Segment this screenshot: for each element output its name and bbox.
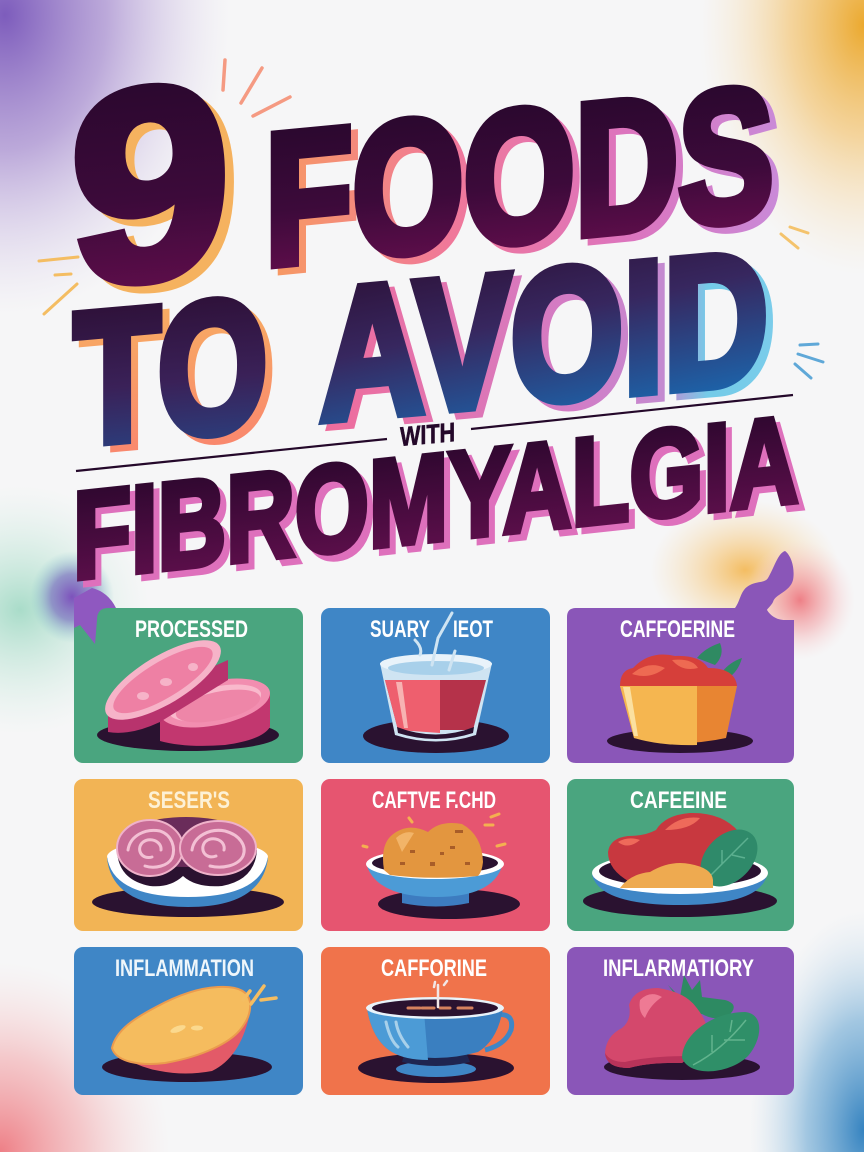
icon: mango half: [102, 986, 276, 1082]
label: CAFEEINE: [630, 787, 727, 814]
label: CAFFORINE: [381, 955, 487, 982]
label: CAFTVE F.CHD: [372, 787, 496, 814]
panel: inflammation: [74, 947, 303, 1095]
panel: sugary: [321, 608, 550, 763]
title word: FIBROMYALGIA: FIBROMYALGIA: [73, 391, 799, 606]
title word: FIBROMYALGIA: FIBROMYALGIA: [79, 397, 805, 612]
panel: processed: [74, 588, 303, 763]
purple splash on card corner: [74, 588, 116, 644]
icon: tomato dessert cup: [607, 643, 753, 753]
label: PROCESSED: [135, 616, 248, 643]
icon: fried food in bowl: [363, 814, 520, 919]
label: [370, 616, 493, 643]
spark lines: blue right: [795, 344, 823, 378]
icon: swirl meat on plate: [92, 817, 284, 917]
spark lines: yellow right: [781, 227, 808, 248]
title word: 9: 9: [79, 32, 239, 350]
icon: drinking glass: [363, 613, 509, 753]
panel: caftive: [321, 779, 550, 931]
icon: sliced sausage: [94, 625, 279, 751]
title divider left: [76, 439, 387, 471]
title word: FOODS: FOODS: [265, 48, 774, 305]
icon: berry and leaves: [604, 975, 760, 1080]
icon: coffee cup: [358, 981, 514, 1083]
panel: sesers: [74, 779, 303, 931]
icon: plated tomato and leaf: [583, 813, 777, 917]
panel: caffeine top: [567, 551, 794, 763]
title divider right: [471, 395, 793, 429]
title: [70, 25, 805, 612]
title word: AVOID: AVOID: [320, 211, 768, 460]
label: INFLARMATIORY: [603, 955, 754, 982]
title word: TO: TO: [74, 259, 268, 485]
panel: cafforine: [321, 947, 550, 1095]
label: IEOT: [453, 616, 493, 643]
panel: inflammatory: [567, 947, 794, 1095]
title word: TO: TO: [81, 265, 275, 491]
label: INFLAMMATION: [115, 955, 254, 982]
label: SESER'S: [148, 787, 230, 814]
label: SUARY: [370, 616, 430, 643]
panel: cafeeine middle: [567, 779, 794, 931]
spark lines: coral: [223, 60, 290, 116]
spark lines: yellow left: [39, 257, 78, 314]
title word: FOODS: FOODS: [272, 54, 781, 311]
title word: WITH: WITH: [400, 418, 455, 453]
label: CAFFOERINE: [620, 616, 735, 643]
title word: AVOID: AVOID: [327, 217, 775, 466]
title word: 9: 9: [70, 25, 230, 343]
